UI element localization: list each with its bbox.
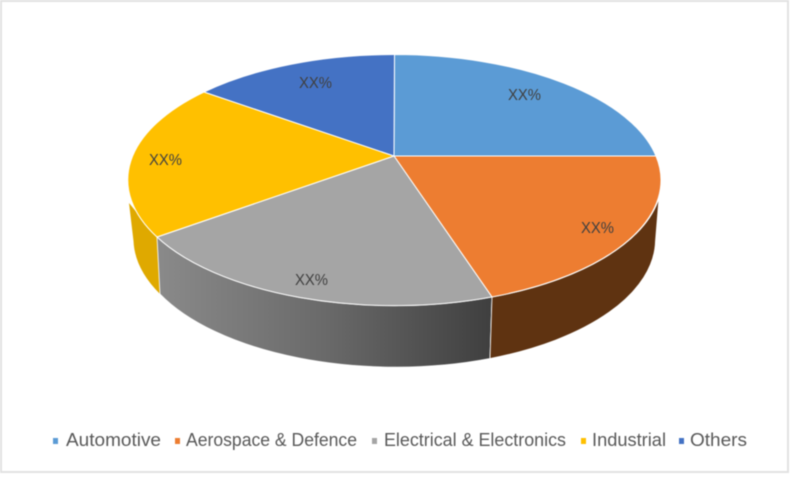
pie side: industrial (129, 203, 160, 294)
label: electrical and electronics: XX% (295, 272, 328, 289)
legend item: electrical and electronics: Electrical & Electronics (384, 430, 566, 450)
pie slice: electrical and electronics (157, 156, 492, 306)
label: industrial: XX% (149, 152, 182, 169)
3D pie chart (128, 54, 661, 367)
label: others: XX% (299, 75, 332, 92)
legend item: automotive: Automotive (66, 430, 161, 450)
label: automotive: XX% (508, 87, 541, 104)
pie slice: industrial (128, 92, 394, 237)
legend item: industrial: Industrial (592, 430, 666, 450)
legend (53, 430, 747, 450)
label: aerospace and defence: XX% (581, 220, 614, 237)
pie side: aerospace and defence (490, 198, 659, 358)
pie slice: others (204, 54, 394, 156)
legend item: others: Others (690, 430, 747, 450)
data labels (149, 75, 614, 289)
pie side: electrical and electronics (157, 237, 492, 367)
legend item: aerospace and defence: Aerospace & Defence (186, 430, 357, 450)
pie slice: aerospace and defence (394, 156, 661, 297)
pie slice: automotive (394, 54, 656, 156)
